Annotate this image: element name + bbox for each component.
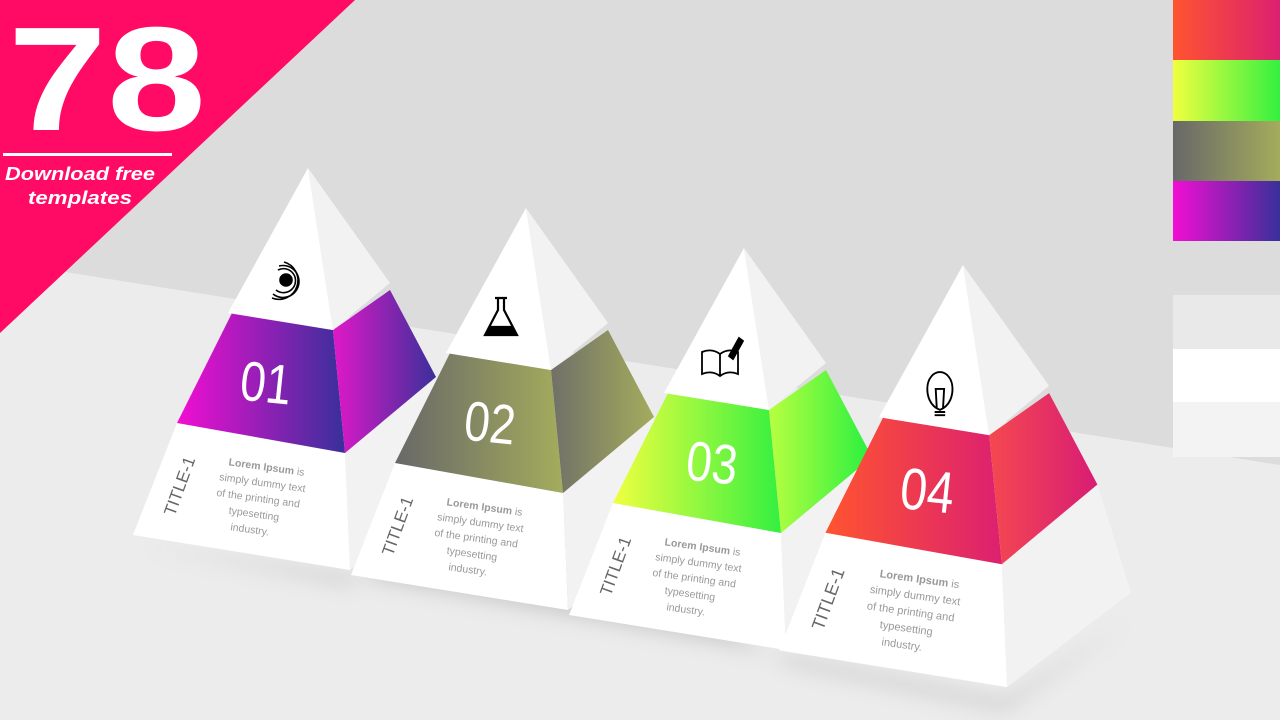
body text 1: simply dummy text — [218, 471, 306, 495]
body text 3: of the printing and — [652, 567, 737, 591]
shadows — [140, 495, 1130, 710]
body text 1: typesetting — [228, 505, 280, 524]
number 01: 01 — [237, 349, 295, 417]
icon: concentric circles — [272, 262, 299, 299]
body text 2 — [429, 495, 527, 583]
pyramid 1 — [133, 168, 468, 570]
banner: top-left pink corner — [0, 0, 355, 333]
icon: flask — [485, 298, 517, 335]
body text 2: of the printing and — [434, 527, 519, 551]
body text 3: Lorem Ipsum is — [664, 536, 741, 559]
body text 3: industry. — [666, 601, 706, 619]
body text 3: simply dummy text — [654, 551, 742, 575]
body text 4: of the printing and — [866, 600, 955, 624]
body text 4: simply dummy text — [869, 584, 961, 608]
body text 3: typesetting — [664, 585, 716, 604]
background floor — [0, 272, 1280, 720]
body text 1: of the printing and — [216, 487, 301, 511]
number 04: 04 — [897, 456, 957, 527]
body text 2: Lorem Ipsum is — [446, 496, 523, 519]
body text 1: industry. — [230, 521, 270, 539]
banner: top-left pink corner: templates — [28, 188, 132, 208]
body text 4 — [861, 567, 963, 658]
body text 2: typesetting — [446, 545, 498, 564]
pyramid 3 — [569, 248, 904, 650]
title 1: TITLE-1 — [160, 454, 199, 518]
body text 1: Lorem Ipsum is — [228, 456, 305, 479]
body text 2: industry. — [448, 561, 488, 579]
banner number: 78 — [8, 0, 206, 162]
title 4: TITLE-1 — [808, 565, 849, 633]
body text 1 — [211, 455, 309, 543]
icon: book and pencil — [702, 338, 743, 376]
body text 4: industry. — [881, 636, 923, 654]
icon: light bulb — [927, 372, 952, 415]
pyramid 2 — [351, 208, 686, 610]
title 3: TITLE-1 — [596, 534, 635, 598]
body text 2: simply dummy text — [436, 511, 524, 535]
title 2: TITLE-1 — [378, 494, 417, 558]
body text 4: typesetting — [879, 619, 933, 638]
pyramid 4 — [779, 265, 1131, 687]
number 03: 03 — [683, 429, 741, 497]
number 02: 02 — [461, 389, 519, 457]
banner caption: Download free — [5, 164, 155, 184]
body text 3 — [647, 535, 745, 623]
color swatches — [1173, 0, 1280, 457]
body text 4: Lorem Ipsum is — [879, 568, 960, 591]
